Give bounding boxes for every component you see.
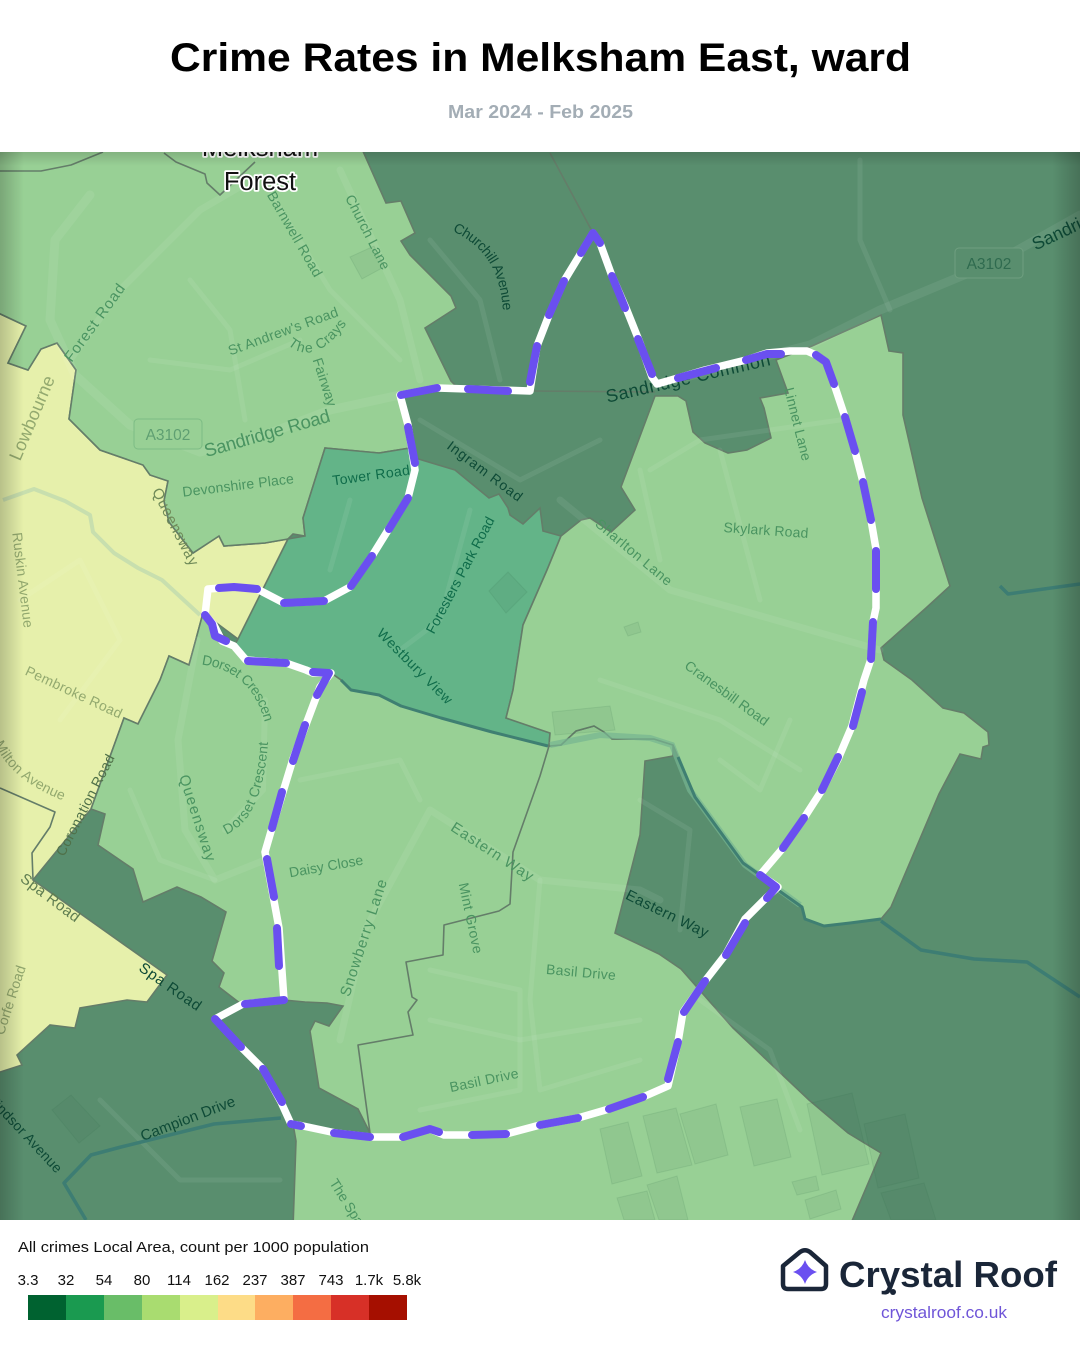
roads: lighter street network: [20, 160, 1080, 1180]
fields and building plots: [52, 246, 936, 1220]
website link: crystalroof.co.uk: [881, 1303, 1008, 1322]
place label: Melksham Forest: [202, 152, 318, 192]
road labels: The Crays: [290, 320, 346, 353]
road labels: Church Lane: [342, 192, 394, 272]
road shield: A3102 east: A3102: [967, 256, 1011, 273]
road labels: Eastern Way: [448, 819, 537, 885]
area: light green north-west: [0, 140, 458, 553]
legend: scale labels: 5.8k: [393, 1272, 422, 1289]
road labels: Lowbourne: [5, 373, 59, 463]
road shield: A3102 east: [955, 248, 1023, 278]
map: [0, 152, 1080, 1220]
area: pale river strip: [550, 735, 800, 905]
road labels: Foresters Park Road: [422, 514, 498, 636]
legend: scale labels: 32: [58, 1272, 74, 1289]
area: darker green background: [0, 152, 1080, 1220]
road labels: Spa Road: [136, 959, 204, 1015]
road labels: Ingram Road: [444, 438, 526, 504]
place label: Melksham Forest: Forest: [224, 168, 296, 196]
area: light green central and south: [91, 613, 881, 1228]
road labels: Forest Road: [61, 281, 129, 365]
road labels: Queensway: [175, 773, 219, 864]
legend title: All crimes Local Area, count per 1000 population: [18, 1239, 369, 1256]
legend: scale labels: 162: [204, 1272, 230, 1289]
legend: scale labels: 743: [318, 1272, 344, 1289]
road labels: Campion Drive: [138, 1093, 238, 1145]
road labels: St Andrew's Road: [226, 304, 340, 358]
road labels: Dorset Crescent: [222, 742, 268, 834]
area: teal lower-crime zone: [234, 448, 561, 746]
logo icon: house with star: [783, 1250, 826, 1289]
ward boundary: purple dashes: [205, 233, 876, 1137]
road shield: A3102 west: [134, 419, 202, 449]
road labels: The Spa: [326, 1176, 368, 1228]
legend: scale labels: 1.7k: [355, 1272, 384, 1289]
legend: scale labels: 54: [96, 1272, 112, 1289]
road labels: Skylark Road: [723, 519, 809, 541]
road labels: Fairway: [310, 356, 340, 408]
road shield: A3102 west: A3102: [146, 427, 190, 444]
legend: colour scale: [28, 1295, 407, 1320]
road labels: Sandridge Common: [604, 349, 772, 407]
map edge shading: [0, 152, 1080, 1220]
road labels: [0, 191, 1080, 1268]
road labels: Churchill Avenue: [454, 224, 510, 310]
road labels: Mint Grove: [456, 881, 486, 955]
road labels: Spa Road: [17, 870, 83, 926]
legend: scale labels: [18, 1272, 422, 1289]
boundary lines inside the map: [0, 152, 655, 1133]
legend: scale labels: 387: [280, 1272, 306, 1289]
road labels: Eastern Way: [623, 887, 712, 942]
rivers and streams: [3, 489, 1080, 1220]
road labels: Sharlton Lane: [592, 515, 676, 589]
legend: scale labels: 114: [167, 1272, 191, 1289]
road labels: Basil Drive: [545, 961, 617, 983]
legend: scale labels: 3.3: [18, 1272, 38, 1289]
road labels: Snowberry Lane: [337, 877, 391, 999]
road labels: Linnet Lane: [781, 386, 815, 463]
road labels: Devonshire Place: [181, 470, 295, 500]
area: yellow west: [0, 311, 288, 1074]
legend: scale labels: 80: [134, 1272, 150, 1289]
road labels: Tower Road: [331, 462, 411, 488]
road labels: Coronation Road: [52, 751, 118, 859]
road labels: Barnwell Road: [264, 188, 326, 280]
road labels: Cranesbill Road: [682, 657, 772, 729]
title: Crime Rates in Melksham East, ward: [170, 36, 911, 80]
logo wordmark: Crystal Roof: [839, 1254, 1058, 1295]
road labels: Queensway: [148, 485, 202, 569]
place label: Melksham Forest: Melksham: [202, 134, 318, 162]
road labels: Westbury View: [374, 625, 457, 708]
road labels: Pembroke Road: [23, 663, 125, 721]
road labels: Ruskin Avenue: [9, 531, 37, 629]
legend: scale labels: 237: [242, 1272, 268, 1289]
ward boundary: white line: [205, 233, 876, 1137]
road labels: Basil Drive: [448, 1065, 520, 1095]
road labels: Daisy Close: [288, 852, 365, 880]
road labels: Sandridge Road: [202, 405, 332, 461]
subtitle: date range: Mar 2024 - Feb 2025: [448, 101, 633, 122]
road labels: Dorset Crescent: [202, 655, 272, 722]
area: light green east: [506, 315, 989, 926]
